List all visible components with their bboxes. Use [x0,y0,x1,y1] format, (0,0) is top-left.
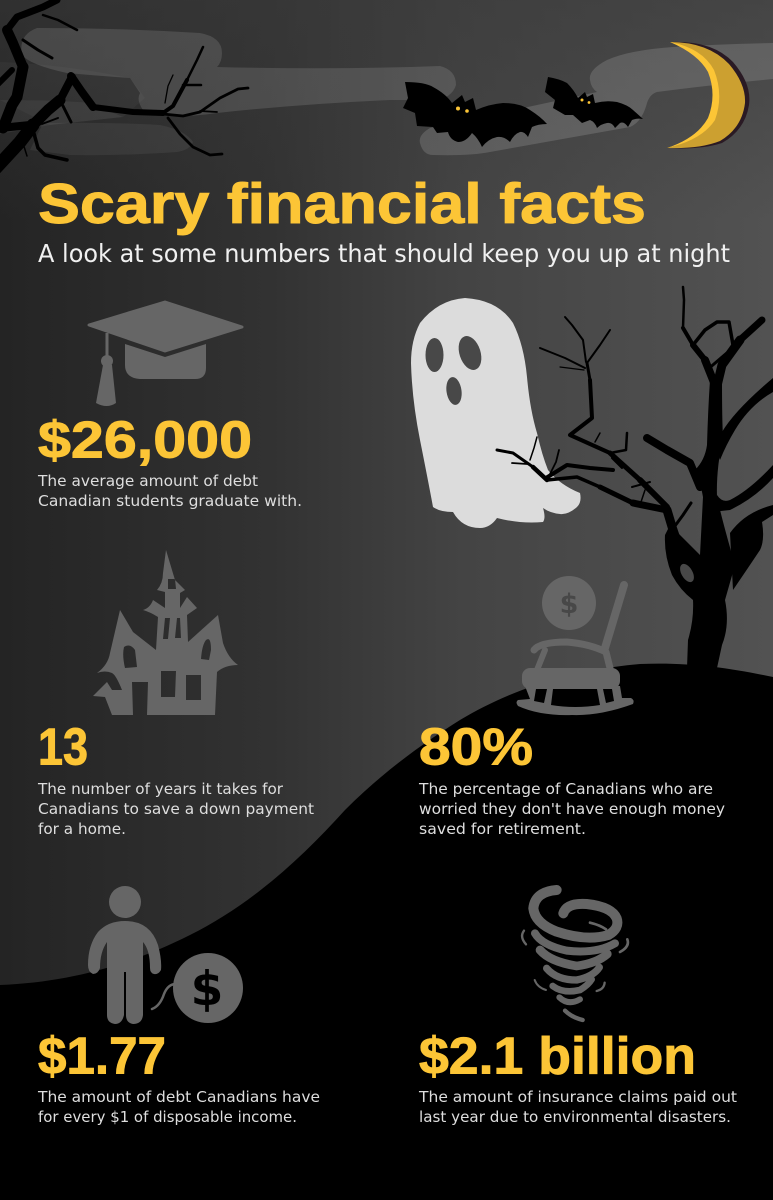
fact: household debt [37,886,320,1126]
value: $26,000: $26,000 [38,412,252,470]
subtitle: A look at some numbers that should keep you up at night [38,239,730,268]
description [37,780,314,838]
tree branch top left [0,0,248,168]
icon: person with ball and chain: $ [191,962,223,1017]
description: The number of years it takes for [37,780,284,798]
value: 13: 13 [38,718,88,776]
description: Canadians to save a down payment [38,800,314,818]
value: $1.77: $1.77 [38,1028,166,1086]
icon: rocking chair with dollar coin [516,576,634,715]
icon: tornado [522,890,628,1020]
icon: person with ball and chain [88,886,243,1024]
bat left [403,82,547,147]
icon: haunted house [93,550,238,715]
description [418,1088,737,1126]
ghost [411,298,581,528]
bat right [545,77,643,128]
description: saved for retirement. [419,820,586,838]
icon: graduation cap [89,302,242,406]
description [37,472,302,510]
value: 80%: 80% [419,718,533,776]
fact: retirement savings [418,576,725,838]
ground hill [0,664,773,1200]
description: The percentage of Canadians who are [418,780,713,798]
description: The amount of insurance claims paid out [418,1088,737,1106]
tree right [497,287,773,668]
description: The amount of debt Canadians have [37,1088,320,1106]
fact: insurance claims [418,890,737,1126]
fact: home down payment [37,550,314,838]
description: Canadian students graduate with. [38,492,302,510]
bats [403,77,643,147]
fact: student debt [37,302,302,510]
icon: rocking chair with dollar coin: $ [560,589,578,620]
title: Scary financial facts [38,172,646,236]
description: worried they don't have enough money [419,800,725,818]
moon [667,42,749,148]
description: for every $1 of disposable income. [38,1108,297,1126]
clouds [0,28,773,155]
description [418,780,725,838]
value: $2.1 billion: $2.1 billion [419,1028,696,1086]
description [37,1088,320,1126]
description: The average amount of debt [37,472,258,490]
description: for a home. [38,820,126,838]
description: last year due to environmental disasters. [419,1108,731,1126]
